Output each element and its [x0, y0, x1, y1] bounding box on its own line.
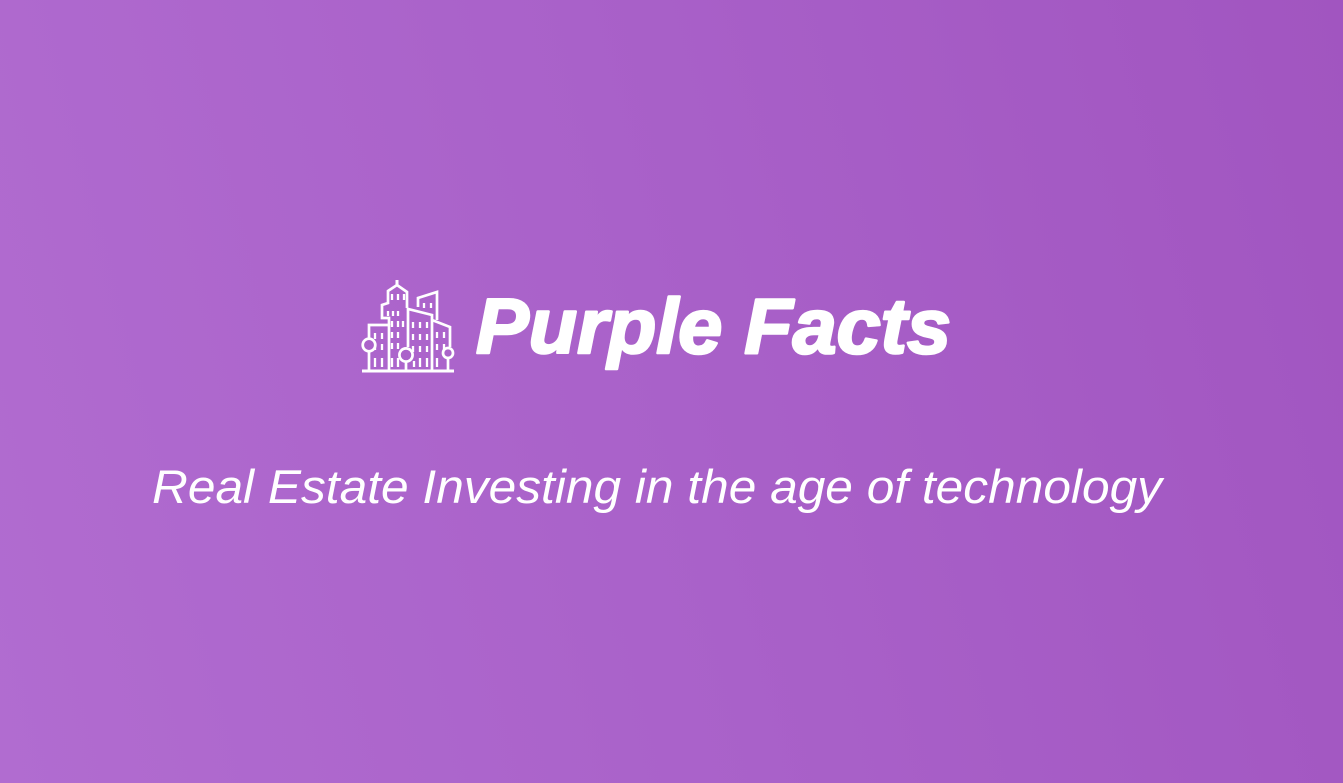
title: Purple Facts — [476, 282, 951, 370]
tagline: Real Estate Investing in the age of technology — [152, 460, 1165, 513]
icon: city buildings — [362, 280, 454, 371]
